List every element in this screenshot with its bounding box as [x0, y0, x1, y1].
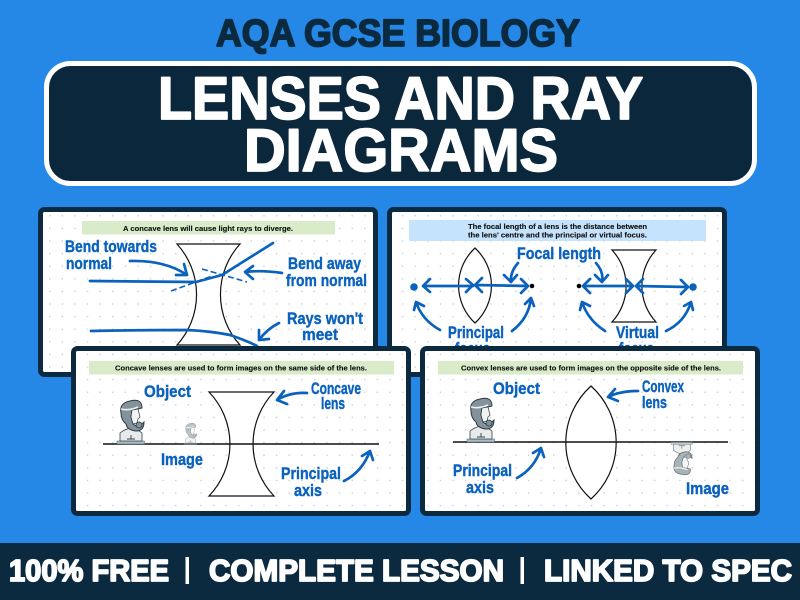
- arrows: focal length pointers: [504, 263, 608, 282]
- label: principal axis: Principal: [453, 461, 512, 480]
- arrow: concave lens pointer: [277, 391, 307, 404]
- label: virtual focus: Virtual: [616, 323, 659, 342]
- label: principal axis: axis: [294, 481, 322, 500]
- double arrows: focal lengths: [423, 278, 688, 294]
- label: principal axis: Principal: [281, 464, 341, 483]
- panel: focal length: [390, 210, 724, 374]
- panel: concave lens diverging rays: [40, 210, 376, 374]
- convex lens shape: [566, 386, 616, 499]
- label: principal focus: [448, 323, 504, 358]
- icon: statue object: [467, 398, 494, 442]
- banner: concave lens statement: A concave lens will cause light rays to diverge.: [123, 224, 293, 233]
- arrows: focus pointers: [414, 298, 693, 331]
- arrow: convex lens pointer: [608, 389, 638, 401]
- title banner: DIAGRAMS: [244, 117, 558, 184]
- label: concave lens: lens: [321, 394, 345, 413]
- ray diagram rays: [90, 243, 273, 346]
- principal axis: [453, 441, 728, 443]
- label: bend towards normal: Bend towards: [65, 237, 157, 256]
- label: virtual focus: [616, 323, 659, 358]
- label: virtual focus: focus: [619, 339, 654, 358]
- concave lens shape: [177, 244, 240, 345]
- arrow: principal axis pointer: [517, 448, 544, 478]
- arrow: bend away: [245, 266, 282, 279]
- label: principal focus: Principal: [448, 323, 504, 342]
- heading: AQA GCSE Biology: AQA GCSE BIOLOGY: [216, 13, 580, 55]
- banner: concave lens images: Concave lenses are used to form images on the same side of the lens.: [115, 364, 367, 372]
- icon: statue object: [117, 400, 144, 444]
- label: principal axis: [281, 464, 341, 500]
- arrow: rays won't meet: [259, 323, 279, 340]
- arrow: bend towards: [130, 261, 187, 275]
- convex lens shape: [459, 248, 491, 323]
- label: object: Object: [144, 382, 191, 401]
- icon: inverted statue image: [671, 442, 692, 475]
- label: rays won't meet: Rays won't: [287, 309, 363, 328]
- banner: concave lens images: [89, 361, 394, 374]
- concave lens shape: [612, 250, 656, 322]
- panel: concave lens image formation: [74, 348, 408, 514]
- label: principal focus: focus: [455, 339, 490, 358]
- focus points: [410, 283, 697, 291]
- label: image: Image: [686, 479, 729, 498]
- label: convex lens: [642, 377, 684, 412]
- banner: convex lens images: [438, 361, 743, 374]
- footer bar: [0, 543, 800, 600]
- concave lens shape: [209, 392, 274, 496]
- label: bend towards normal: [65, 237, 157, 273]
- label: convex lens: Convex: [642, 377, 684, 396]
- footer bar: 100% FREE: [9, 553, 169, 588]
- label: bend towards normal: normal: [66, 254, 112, 273]
- banner: focal length definition: [409, 220, 706, 241]
- label: concave lens: [311, 379, 361, 413]
- title banner: LENSES AND RAY: [158, 65, 643, 132]
- label: rays won't meet: meet: [302, 325, 338, 344]
- footer bar: LINKED TO SPEC: [544, 553, 792, 588]
- footer bar: COMPLETE LESSON: [209, 553, 504, 588]
- label: image: Image: [161, 450, 203, 469]
- banner: focal length definition: the lens' centre and the principal or virtual focus.: [468, 230, 647, 240]
- panel: convex lens image formation: [422, 348, 758, 514]
- label: focal length: Focal length: [517, 244, 601, 263]
- label: convex lens: lens: [642, 393, 667, 412]
- banner: focal length definition: The focal length of a lens is the distance between: [468, 222, 647, 231]
- label: object: Object: [493, 379, 540, 398]
- label: concave lens: Concave: [311, 379, 361, 398]
- arrow: principal axis pointer: [344, 451, 373, 481]
- label: bend away from normal: Bend away: [288, 254, 361, 273]
- principal axis: [103, 443, 379, 445]
- label: principal axis: [453, 461, 512, 497]
- title banner: [46, 64, 754, 184]
- banner: convex lens images: Convex lenses are used to form images on the opposite side of the lens.: [461, 364, 721, 372]
- label: bend away from normal: [286, 254, 367, 290]
- normal lines: [171, 269, 247, 291]
- icon: statue image: [184, 423, 197, 445]
- label: bend away from normal: from normal: [286, 271, 367, 290]
- banner: concave lens statement: [82, 221, 335, 234]
- label: principal axis: axis: [466, 478, 494, 497]
- label: rays won't meet: [287, 309, 363, 344]
